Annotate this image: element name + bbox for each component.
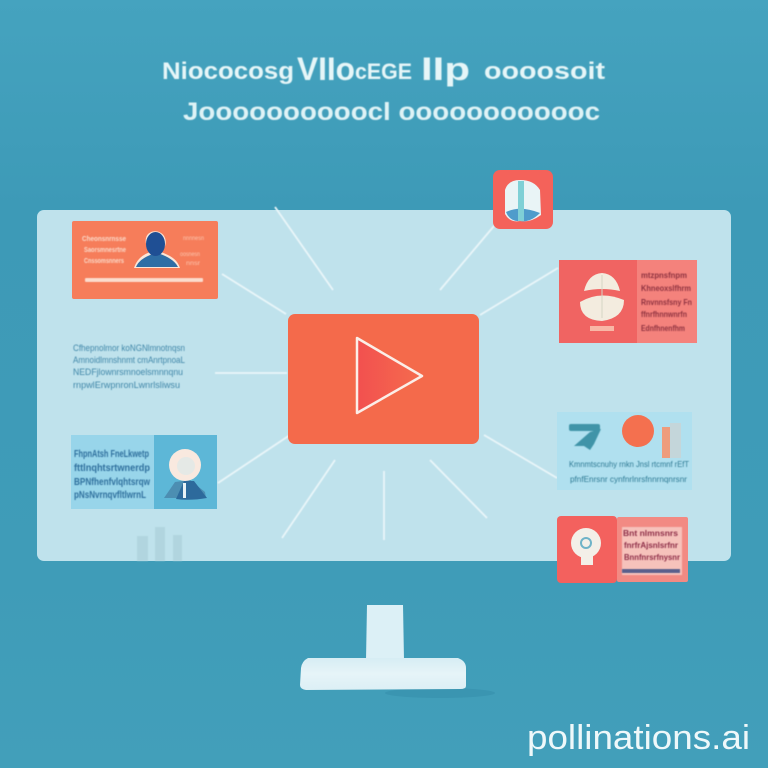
card text [74, 449, 150, 501]
connector rays [215, 207, 558, 540]
card footer line [85, 278, 203, 282]
title: IIp [421, 51, 470, 87]
card text: Ednfhnenfhm [641, 323, 685, 333]
title [162, 51, 605, 87]
watermark: pollinations.ai [527, 719, 750, 757]
card text: pfnfEnrsnr cynfnrlnrsfnnrnqnrsnr [570, 475, 687, 484]
text block left [73, 343, 185, 391]
card text left: Saorsmnesrtne [84, 247, 126, 254]
card: illustrated panel [557, 412, 692, 490]
stand base [300, 658, 466, 690]
card text: Khneoxslfhrm [641, 283, 691, 293]
icon: play triangle [357, 338, 422, 413]
card text right: nnnnesn [183, 236, 204, 242]
faint bar chart [137, 527, 182, 561]
card text: Bnt nlmnsnrs [623, 529, 679, 538]
card text [569, 460, 689, 484]
card text right [180, 236, 204, 267]
card: blue profile [71, 435, 217, 509]
card text: pNsNvrnqvfltlwrnL [74, 490, 146, 501]
icon: lungs [505, 180, 541, 221]
icon: person with white hair [164, 449, 207, 500]
card text [623, 529, 680, 562]
card: right coral [559, 260, 697, 343]
card text right: oosnesn [180, 252, 200, 258]
card text: fttlnqhtsrtwnerdp [74, 463, 150, 474]
card text right: nnsr [186, 261, 200, 267]
subtitle: Joooooooooocl oooooooooooc [183, 98, 600, 126]
card: bottom right coral [557, 516, 688, 583]
text block left: Amnoidlmnshnmt cmAnrtpnoaL [73, 355, 185, 366]
center video player [288, 314, 479, 444]
monitor screen panel [37, 210, 731, 561]
icon card: top right [493, 170, 553, 229]
text block left: Cfhepnolmor koNGNlmnotnqsn [73, 343, 185, 354]
title: oooosoit [484, 58, 605, 85]
icon: split circle [580, 273, 624, 331]
colored footer strip [622, 569, 680, 573]
card text: Bnnfnrsrfnysnr [624, 553, 680, 562]
card text: ffnrfhnnwnrfn [641, 309, 687, 319]
card text: FhpnAtsh FneLkwetp [74, 449, 149, 460]
card text left: Cheonsnrnsse [82, 236, 126, 243]
title: cEGE [355, 59, 412, 84]
card text: BPNfhenfvlqhtsrqw [74, 477, 150, 488]
card text: Rnvnnsfsny Fn [641, 297, 692, 307]
chart bars [662, 423, 681, 458]
title: Niococosg [162, 58, 294, 85]
title: VIIo [297, 51, 355, 87]
icon: head profile [571, 528, 601, 565]
text block left: rnpwlErwpnronLwnrlsliwsu [73, 380, 180, 391]
card text: Kmnmtscnuhy rnkn Jnsl rtcmnf rEfT [569, 460, 689, 469]
stand shadow [385, 688, 495, 698]
stand neck [366, 605, 404, 660]
card text left: Cnssomsnners [84, 258, 124, 265]
monitor stand [300, 605, 495, 698]
text block left: NEDFjlownrsmnoelsmnnqnu [73, 367, 183, 378]
text background [622, 527, 682, 575]
card: orange profile [72, 221, 218, 299]
card text [641, 270, 692, 333]
icon: person [134, 231, 180, 268]
icon: orange circle [622, 415, 654, 447]
card text: fnrfrAjsnlsrfnr [624, 541, 678, 550]
card text left [82, 236, 126, 265]
card text: mtzpnsfnpm [641, 270, 687, 280]
icon: teal figure [569, 424, 601, 450]
